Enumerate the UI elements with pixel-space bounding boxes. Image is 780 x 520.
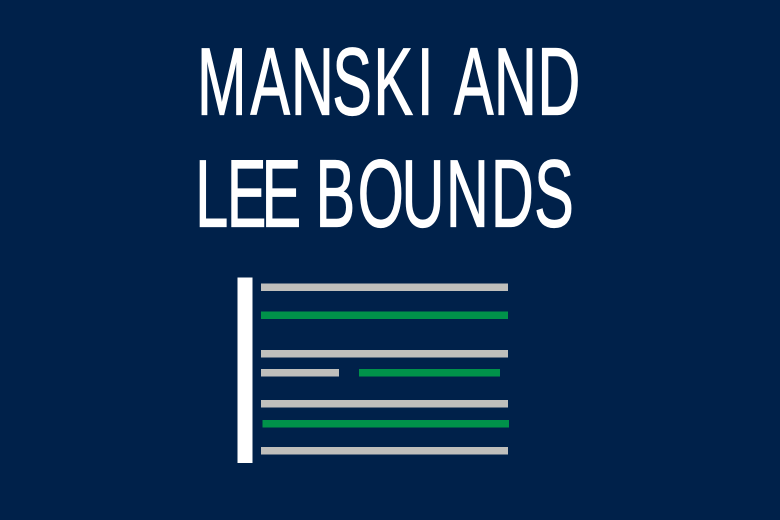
green short line [359, 369, 500, 376]
grey line 2 [261, 350, 508, 358]
green line 2 [262, 420, 509, 428]
grey short line [261, 369, 339, 376]
grey line 4 [261, 447, 508, 454]
vertical white bar [238, 278, 252, 463]
title line 1: MANSKI AND [197, 28, 580, 135]
title [195, 28, 580, 247]
grey line 1 [261, 284, 508, 291]
grey line 3 [261, 400, 508, 408]
title line 2: LEE BOUNDS [195, 140, 574, 247]
green line 1 [261, 312, 508, 319]
icon: document with highlighted lines [238, 278, 509, 463]
